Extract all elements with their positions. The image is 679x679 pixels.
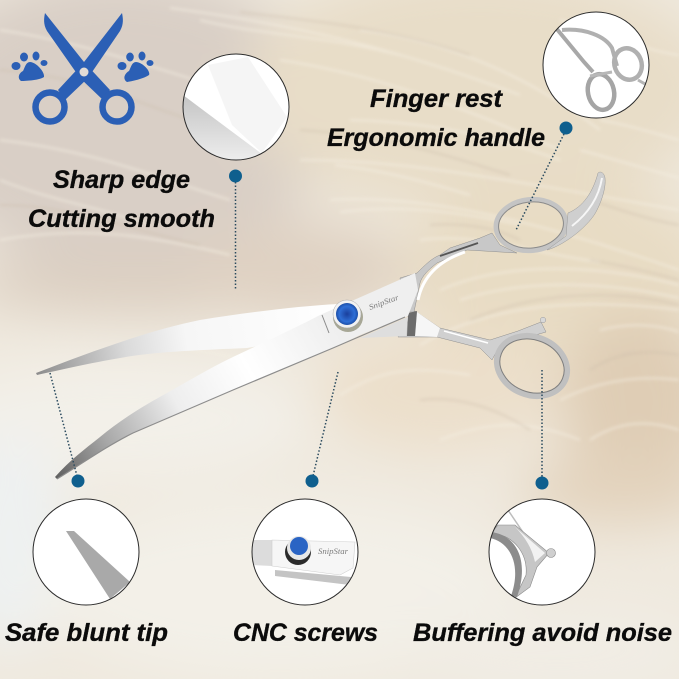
label: Sharp edge — [53, 166, 190, 194]
icon: blue scissors — [36, 13, 132, 122]
upper blade — [36, 304, 350, 375]
leader dot and line — [50, 373, 84, 488]
lower blade — [55, 273, 418, 479]
callout: finger rest — [327, 12, 652, 230]
callout: safe blunt tip — [5, 373, 168, 647]
upper handle with finger rest — [400, 172, 605, 312]
icon: left paw — [12, 52, 48, 81]
callout: CNC screws — [233, 372, 378, 647]
screw: blue gem — [333, 300, 363, 332]
detail circle: screw: SnipStar — [318, 547, 349, 556]
leader dot and line — [536, 370, 548, 490]
lower handle with buffer — [360, 311, 576, 406]
leader dot and line — [306, 372, 338, 488]
label: Safe blunt tip — [5, 619, 168, 647]
icon: scissors and paws logo — [12, 13, 154, 122]
callout: sharp edge — [28, 54, 289, 290]
detail circle: buffer stud — [489, 499, 595, 605]
callout: buffering avoid noise — [413, 370, 672, 647]
leader dot and line — [516, 122, 572, 230]
main scissors photo — [36, 172, 605, 479]
detail circle: handle — [543, 12, 652, 118]
icon: right paw — [118, 52, 154, 82]
detail circle: blade edge — [183, 54, 289, 165]
detail circle: screw — [252, 499, 358, 605]
detail circle: blade tip — [33, 499, 139, 605]
leader dot and line — [229, 170, 242, 290]
brand text on blade: SnipStar — [368, 292, 401, 312]
callout: finger rest: Ergonomic handle — [327, 124, 545, 152]
label: CNC screws — [233, 619, 378, 647]
blade ricasso mark — [322, 315, 329, 333]
label: Buffering avoid noise — [413, 619, 672, 647]
callout: sharp edge: Cutting smooth — [28, 205, 215, 233]
label: Finger rest — [370, 85, 504, 113]
